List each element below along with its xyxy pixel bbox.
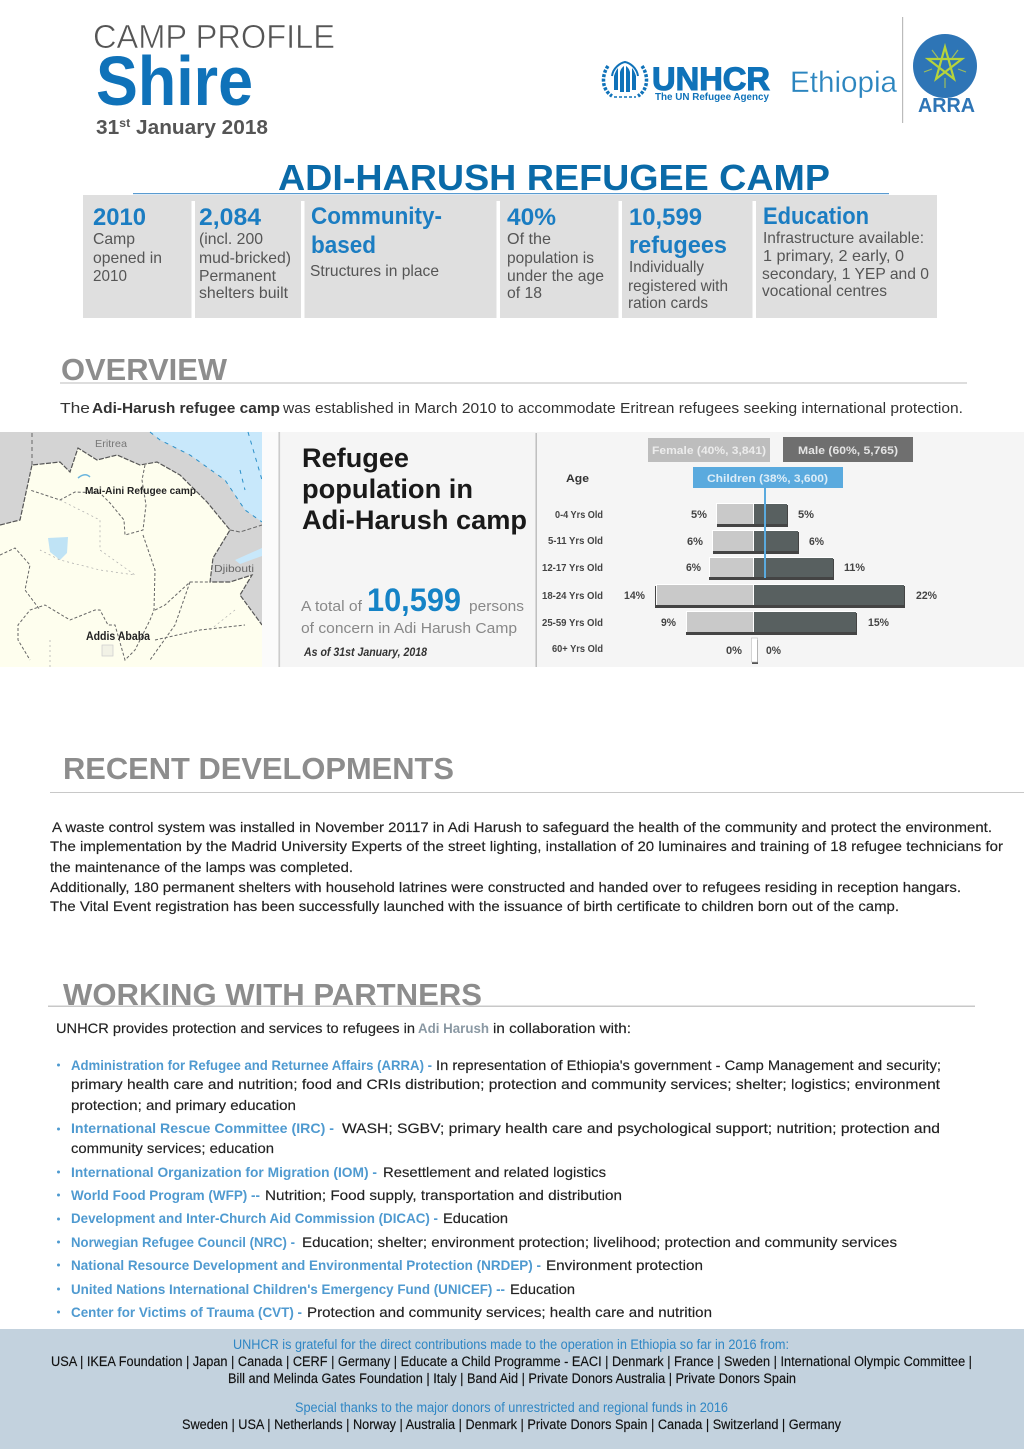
female values: 9%: [661, 617, 676, 629]
children marker line: [764, 488, 766, 578]
text: contributions thanks: UNHCR is grateful for the direct contributions made to the operation in Ethiopia so far in 2016 from:: [233, 1337, 789, 1352]
partner: DICAC: Development and Inter-Church Aid Commission (DICAC) -: [71, 1210, 438, 1226]
figure: education: vocational centres: [762, 283, 887, 300]
male values: 22%: [916, 590, 937, 602]
age labels: 12-17 Yrs Old: [542, 562, 603, 574]
big number: 10,599: [367, 582, 461, 618]
figure: permanent shelters: mud-bricked): [199, 250, 291, 267]
figure: refugees: 10,599: [629, 204, 702, 231]
region borders: [0, 465, 245, 660]
partner: UNICEF: Education: [510, 1281, 575, 1297]
figure: refugees: ration cards: [628, 295, 708, 312]
map: Ethiopia north: [0, 432, 262, 667]
male values: [766, 509, 937, 657]
icon: UNHCR emblem: [603, 62, 647, 97]
figure: permanent shelters: shelters built: [199, 285, 289, 302]
text block: total persons: A total of: [301, 598, 363, 615]
text block: partners intro: Adi Harush: [418, 1020, 489, 1036]
header: camp profile title: [93, 18, 335, 139]
text block: total persons: [301, 582, 524, 659]
icon: ARRA emblem: [913, 34, 977, 98]
gap strip and dividers: [262, 432, 537, 667]
figure: camp opened: 2010: [93, 204, 146, 231]
partner: CVT: Center for Victims of Trauma (CVT) -: [71, 1304, 302, 1320]
age labels: 18-24 Yrs Old: [542, 590, 603, 602]
text block: recent developments: Additionally, 180 permanent shelters with household latrines were constructed and handed over to refugees residing in reception hangars.: [50, 879, 961, 895]
heading: refugee population: Refugee: [302, 443, 409, 473]
partner: WFP: Nutrition; Food supply, transportation and distribution: [265, 1187, 622, 1203]
figure: under 18: [507, 204, 604, 302]
map label: Addis Ababa: Addis Ababa: [86, 631, 151, 643]
legend: male: Male (60%, 5,765): [798, 445, 898, 457]
legend: children: [693, 467, 843, 488]
figure: community-based structures: [310, 203, 442, 280]
sea: [150, 432, 262, 522]
logo text: Ethiopia: Ethiopia: [790, 66, 897, 99]
text block: overview: Adi-Harush refugee camp: [92, 400, 280, 417]
heading: recent developments: RECENT DEVELOPMENTS: [63, 751, 454, 786]
partner: CVT: [57, 1304, 712, 1320]
partner: NRC: Norwegian Refugee Council (NRC) -: [71, 1234, 295, 1250]
text block: total persons: of concern in Adi Harush Camp: [301, 620, 517, 637]
date: 31: [96, 117, 118, 139]
axis title: age: Age: [566, 473, 589, 485]
date: January 2018: [130, 117, 268, 139]
partner: IOM: Resettlement and related logistics: [383, 1164, 606, 1180]
text block: recent developments: A waste control system was installed in November 20117 in Adi Harush to safeguard the health of the community and protect the environment.: [52, 819, 992, 835]
partner: WFP: World Food Program (WFP) --: [71, 1187, 260, 1203]
text block: recent developments: The implementation by the Madrid University Experts of the street lighting, installation of 20 luminaires and training of 18 refugee technicians for: [50, 838, 1003, 854]
male values: 0%: [766, 645, 781, 657]
male values: 6%: [809, 536, 824, 548]
figure: refugees: refugees: [629, 232, 727, 259]
bars: [655, 503, 905, 664]
figure: under 18: Of the: [507, 231, 551, 248]
partner: ARRA: primary health care and nutrition; food and CRIs distribution; protection and community services; shelter; logistics; environment: [71, 1076, 940, 1092]
age labels: [542, 509, 603, 655]
heading: Shire: Shire: [96, 42, 253, 120]
figure: camp opened: [93, 204, 162, 285]
text block: partners intro: UNHCR provides protection and services to refugees in: [56, 1020, 415, 1036]
partner: IRC: community services; education: [71, 1140, 274, 1156]
figure: under 18: of 18: [507, 285, 542, 302]
text block: total persons: As of 31st January, 2018: [303, 647, 428, 659]
figure: under 18: 40%: [507, 204, 556, 231]
age labels: 0-4 Yrs Old: [555, 509, 603, 521]
female values: 14%: [624, 590, 645, 602]
heading: overview: OVERVIEW: [61, 352, 228, 387]
partner: IOM: [57, 1164, 606, 1180]
figure: education: Infrastructure available:: [763, 230, 924, 247]
text block: partners intro: [56, 1020, 631, 1036]
legend: male: [783, 437, 913, 462]
figure: community-based structures: based: [311, 232, 376, 259]
female values: 6%: [687, 536, 703, 548]
figure: community-based structures: Structures in place: [310, 263, 439, 280]
figure: education: Education: [763, 203, 869, 230]
figure: camp opened: opened in: [93, 250, 162, 267]
age labels: 5-11 Yrs Old: [548, 535, 603, 547]
figure: community-based structures: Community-: [311, 203, 442, 230]
text: special thanks: Special thanks to the major donors of unrestricted and regional funds in 2016: [295, 1400, 728, 1415]
heading: working with partners: WORKING WITH PARTNERS: [63, 977, 482, 1012]
age labels: 60+ Yrs Old: [552, 643, 603, 655]
female values: 6%: [686, 562, 701, 574]
text: donors list: USA | IKEA Foundation | Japan | Canada | CERF | Germany | Educate a Child Programme - EACI | Denmark | France | Sweden | International Olympic Committee |: [51, 1354, 972, 1369]
text block: recent developments: [50, 819, 1003, 914]
logo text: tagline: The UN Refugee Agency: [655, 92, 769, 103]
figure: permanent shelters: [199, 204, 291, 302]
figure: permanent shelters: 2,084: [199, 204, 262, 231]
logo text: UNHCR: UNHCR: [652, 61, 770, 97]
figure: refugees: Individually: [629, 259, 704, 276]
figure: education: secondary, 1 YEP and 0: [762, 266, 929, 283]
age labels: 25-59 Yrs Old: [542, 617, 603, 629]
legend: female: [648, 438, 770, 462]
text block: overview: The: [60, 400, 90, 417]
figure: camp opened: Camp: [93, 231, 135, 248]
text block: overview: was established in March 2010 to accommodate Eritrean refugees seeking international protection.: [282, 400, 963, 417]
figure: under 18: population is: [507, 250, 594, 267]
female values: [624, 509, 742, 657]
partner: IRC: WASH; SGBV; primary health care and psychological support; nutrition; protection and: [342, 1120, 940, 1136]
logos: UNHCR Ethiopia and ARRA: [603, 17, 977, 123]
partner: ARRA: [57, 1057, 941, 1113]
figure: refugees: registered with: [628, 278, 728, 295]
partner: NRDEP: Environment protection: [546, 1257, 703, 1273]
figure: permanent shelters: Permanent: [199, 268, 277, 285]
map label: Djibouti: Djibouti: [214, 563, 254, 575]
legend: female: Female (40%, 3,841): [652, 445, 766, 457]
male values: 11%: [844, 562, 865, 574]
partner: IRC: [57, 1120, 940, 1156]
male values: 15%: [868, 617, 889, 629]
partner: NRDEP: National Resource Development and Environmental Protection (NRDEP) -: [71, 1257, 541, 1273]
partner: ARRA: Administration for Refugee and Returnee Affairs (ARRA) -: [71, 1057, 432, 1073]
lake: [48, 537, 68, 560]
chart: population pyramid: [542, 437, 937, 664]
partner: ARRA: In representation of Ethiopia's government - Camp Management and security;: [436, 1057, 941, 1073]
figure: education: 1 primary, 2 early, 0: [763, 248, 904, 265]
male values: 5%: [798, 509, 814, 521]
female values: 5%: [691, 509, 707, 521]
partner: UNICEF: United Nations International Children's Emergency Fund (UNICEF) --: [71, 1281, 505, 1297]
partner: IOM: International Organization for Migration (IOM) -: [71, 1164, 377, 1180]
heading: refugee population: population in: [302, 474, 473, 504]
figure: permanent shelters: (incl. 200: [199, 231, 263, 248]
text block: total persons: persons: [469, 598, 524, 615]
map label: Eritrea: Eritrea: [95, 438, 127, 450]
text: donors list: [51, 1354, 972, 1386]
divider: [902, 17, 903, 123]
figure: refugees: [628, 204, 728, 312]
partner: NRC: Education; shelter; environment protection; livelihood; protection and community services: [302, 1234, 897, 1250]
figure: education: [762, 203, 929, 300]
partner: DICAC: Education: [443, 1210, 508, 1226]
partner: WFP: [57, 1187, 622, 1203]
partner: NRC: [57, 1234, 897, 1250]
partner: ARRA: protection; and primary education: [71, 1097, 296, 1113]
panel: population background: [262, 432, 1024, 667]
legend: children: Children (38%, 3,600): [707, 473, 828, 485]
heading: camp profile: CAMP PROFILE: [93, 18, 335, 55]
panel: donors footer: [0, 1329, 1024, 1449]
heading: refugee population: Adi-Harush camp: [302, 505, 527, 535]
figure: camp opened: 2010: [93, 268, 127, 285]
text block: partners intro: in collaboration with:: [493, 1020, 631, 1036]
heading: refugee population: [302, 443, 527, 535]
text: donors list: Bill and Melinda Gates Foundation | Italy | Band Aid | Private Donors Australia | Private Donors Spain: [228, 1371, 796, 1386]
logo text: ARRA: ARRA: [918, 95, 975, 117]
list: partners: [57, 1057, 941, 1320]
text block: recent developments: The Vital Event registration has been successfully launched with the issuance of birth certificate to children born out of the camp.: [50, 898, 899, 914]
text: major donors list: Sweden | USA | Netherlands | Norway | Australia | Denmark | Private Donors Spain | Canada | Switzerland | Germany: [182, 1417, 841, 1432]
partner: CVT: Protection and community services; health care and nutrition: [307, 1304, 712, 1320]
female values: 0%: [726, 645, 742, 657]
partner: IRC: International Rescue Committee (IRC) -: [71, 1120, 334, 1136]
main title: Adi-Harush refugee camp: ADI-HARUSH REFUGEE CAMP: [278, 157, 830, 198]
land: [0, 448, 262, 667]
map label: camp: Mai-Aini Refugee camp: [85, 485, 196, 497]
panel: key figures: [83, 195, 937, 318]
date: st: [119, 116, 130, 130]
figure: under 18: under the age: [507, 268, 604, 285]
text block: recent developments: the maintenance of the lamps was completed.: [50, 859, 353, 875]
